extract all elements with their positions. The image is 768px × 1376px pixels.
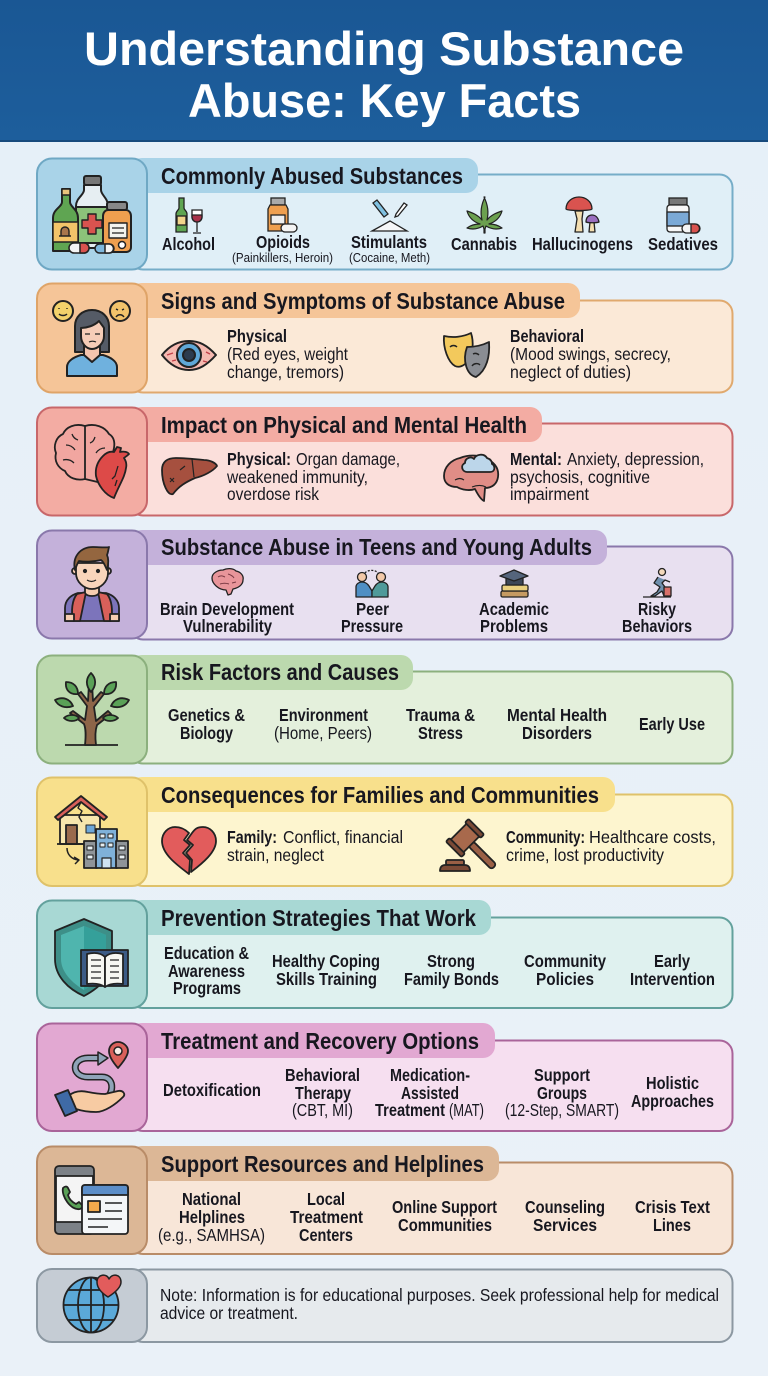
item: risky behaviors xyxy=(622,568,692,636)
icon: phone and web page xyxy=(55,1166,128,1234)
icon: brain and heart xyxy=(55,425,129,498)
item: physical impact: overdose risk xyxy=(227,484,319,504)
item: risky behaviors: Behaviors xyxy=(622,616,692,636)
item: academic problems: Problems xyxy=(480,616,548,636)
item: behavioral signs: (Mood swings, secrecy, xyxy=(510,344,671,364)
panel: treatment and recovery xyxy=(37,1023,732,1131)
items: prevention strategies: Skills Training xyxy=(276,969,377,989)
item: peer pressure xyxy=(341,570,403,636)
items: treatment options: Approaches xyxy=(631,1091,714,1111)
items: prevention strategies: Education & xyxy=(164,943,249,963)
items: risk factors: Trauma & xyxy=(406,705,475,725)
item: community consequences: crime, lost productivity xyxy=(506,845,664,865)
item: family consequences: Family: xyxy=(227,827,277,847)
items: prevention strategies: Community xyxy=(524,951,606,971)
item: academic problems xyxy=(479,570,549,636)
items: prevention strategies: Intervention xyxy=(630,969,715,989)
panel: teens and young adults xyxy=(37,530,732,640)
note text: advice or treatment. xyxy=(160,1303,298,1323)
heading: Risk Factors and Causes xyxy=(161,659,399,685)
items: treatment options: (12-Step, SMART) xyxy=(505,1100,619,1120)
items: treatment options: Therapy xyxy=(295,1083,351,1103)
item: cannabis: Cannabis xyxy=(451,234,517,254)
item: behavioral signs xyxy=(444,326,671,382)
items: prevention strategies: Programs xyxy=(173,978,241,998)
item: stimulants: (Cocaine, Meth) xyxy=(349,251,430,265)
item: family consequences xyxy=(162,827,403,874)
items: treatment options: Behavioral xyxy=(285,1065,360,1085)
item: opioids: (Painkillers, Heroin) xyxy=(232,251,333,265)
items: treatment options: (CBT, MI) xyxy=(292,1100,353,1120)
items: prevention strategies: Policies xyxy=(536,969,594,989)
items: prevention strategies xyxy=(164,943,715,998)
heading: Signs and Symptoms of Substance Abuse xyxy=(161,288,565,314)
item: physical signs: (Red eyes, weight xyxy=(227,344,348,364)
items: treatment options: Support xyxy=(534,1065,590,1085)
items: support resources: (e.g., SAMHSA) xyxy=(158,1225,265,1245)
items: support resources: Centers xyxy=(299,1225,353,1245)
item: family consequences: Conflict, financial xyxy=(283,827,403,847)
items: support resources: Lines xyxy=(653,1215,691,1235)
item: mental impact: Mental: xyxy=(510,449,562,469)
heading: Consequences for Families and Communities xyxy=(161,782,599,808)
items: support resources: Local xyxy=(307,1189,345,1209)
items: support resources: Services xyxy=(533,1215,597,1235)
title: Abuse: Key Facts xyxy=(188,74,581,127)
item: mental impact: Anxiety, depression, xyxy=(567,449,704,469)
title: Understanding Substance xyxy=(84,22,684,75)
item: physical signs xyxy=(162,326,348,382)
items: support resources xyxy=(158,1189,710,1245)
item: brain development xyxy=(160,569,294,636)
item: physical impact: Organ damage, xyxy=(296,449,400,469)
item: behavioral signs: Behavioral xyxy=(510,326,584,346)
heading: Prevention Strategies That Work xyxy=(161,905,477,931)
panel: prevention strategies xyxy=(37,900,732,1008)
items: support resources: Crisis Text xyxy=(635,1197,710,1217)
item: peer pressure: Pressure xyxy=(341,616,403,636)
item: family consequences: strain, neglect xyxy=(227,845,324,865)
icon: person with moods xyxy=(53,301,130,376)
title xyxy=(84,22,684,127)
items: risk factors: (Home, Peers) xyxy=(274,723,372,743)
items: support resources: Helplines xyxy=(179,1207,245,1227)
item: cannabis xyxy=(451,197,517,254)
item: peer pressure: Peer xyxy=(356,599,389,619)
items: risk factors: Early Use xyxy=(639,714,705,734)
items: risk factors: Disorders xyxy=(522,723,592,743)
items: treatment options: Medication- xyxy=(390,1065,470,1085)
panel: note xyxy=(37,1269,732,1342)
panel: support resources xyxy=(37,1146,732,1254)
panel: signs and symptoms xyxy=(37,283,732,392)
item: sedatives xyxy=(648,198,718,254)
item: physical signs: change, tremors) xyxy=(227,362,344,382)
icon: tree xyxy=(55,673,129,745)
icon: bottles and pills xyxy=(53,176,131,253)
item: alcohol: Alcohol xyxy=(162,234,215,254)
items: prevention strategies: Strong xyxy=(427,951,475,971)
items: risk factors: Mental Health xyxy=(507,705,607,725)
items: support resources: Online Support xyxy=(392,1197,497,1217)
note text xyxy=(160,1285,719,1323)
icon: student with backpack xyxy=(65,547,119,621)
items: support resources: Counseling xyxy=(525,1197,605,1217)
items: treatment options: Holistic xyxy=(646,1073,699,1093)
item: opioids: Opioids xyxy=(256,232,310,252)
heading: Impact on Physical and Mental Health xyxy=(161,412,527,438)
icon: cracked house and buildings xyxy=(55,796,128,868)
item: mental impact: psychosis, cognitive xyxy=(510,467,650,487)
item: physical signs: Physical xyxy=(227,326,287,346)
heading: Substance Abuse in Teens and Young Adults xyxy=(161,534,592,560)
panel: risk factors and causes xyxy=(37,655,732,764)
note text: Note: Information is for educational purposes. Seek professional help for medical xyxy=(160,1285,719,1305)
item: community consequences xyxy=(440,819,716,878)
items: prevention strategies: Healthy Coping xyxy=(272,951,380,971)
icon: hand with path and pin xyxy=(55,1042,128,1116)
items: support resources: Treatment xyxy=(290,1207,363,1227)
header banner xyxy=(0,0,768,142)
items: prevention strategies: Early xyxy=(654,951,690,971)
item: physical impact: weakened immunity, xyxy=(226,467,368,487)
heading: Treatment and Recovery Options xyxy=(161,1028,479,1054)
item: hallucinogens xyxy=(532,197,633,254)
item: sedatives: Sedatives xyxy=(648,234,718,254)
item: behavioral signs: neglect of duties) xyxy=(510,362,631,382)
heading: Commonly Abused Substances xyxy=(161,163,463,189)
items: risk factors: Genetics & xyxy=(168,705,245,725)
items: risk factors xyxy=(168,705,705,743)
item: opioids xyxy=(232,198,333,265)
items: prevention strategies: Awareness xyxy=(168,961,245,981)
item: stimulants xyxy=(349,200,430,265)
item: brain development: Brain Development xyxy=(160,599,294,619)
item: academic problems: Academic xyxy=(479,599,549,619)
items: treatment options: (MAT) xyxy=(449,1100,484,1120)
items: risk factors: Biology xyxy=(180,723,233,743)
items: treatment options: Assisted xyxy=(401,1083,459,1103)
item: brain development: Vulnerability xyxy=(183,616,272,636)
icon: shield and book xyxy=(55,919,128,996)
items: treatment options: Groups xyxy=(537,1083,587,1103)
panel: commonly abused substances xyxy=(37,158,732,270)
items: treatment options xyxy=(163,1065,714,1120)
item: alcohol xyxy=(162,198,215,254)
items: support resources: National xyxy=(182,1189,241,1209)
items: risk factors: Environment xyxy=(279,705,368,725)
panel: consequences xyxy=(37,777,732,886)
items: treatment options: Treatment xyxy=(375,1100,445,1120)
item: risky behaviors: Risky xyxy=(638,599,676,619)
item: community consequences: Community: xyxy=(506,827,585,847)
item: physical impact xyxy=(162,449,400,504)
items: support resources: Communities xyxy=(398,1215,492,1235)
item: hallucinogens: Hallucinogens xyxy=(532,234,633,254)
item: mental impact: impairment xyxy=(510,484,589,504)
item: community consequences: Healthcare costs, xyxy=(589,827,716,847)
item: stimulants: Stimulants xyxy=(351,232,427,252)
heading: Support Resources and Helplines xyxy=(161,1151,484,1177)
items: treatment options: Detoxification xyxy=(163,1080,261,1100)
panel: impact on health xyxy=(37,407,732,516)
items: prevention strategies: Family Bonds xyxy=(404,969,499,989)
icon: globe with heart xyxy=(64,1275,121,1332)
item: physical impact: Physical: xyxy=(227,449,291,469)
item: mental impact xyxy=(444,449,704,504)
items: risk factors: Stress xyxy=(418,723,463,743)
